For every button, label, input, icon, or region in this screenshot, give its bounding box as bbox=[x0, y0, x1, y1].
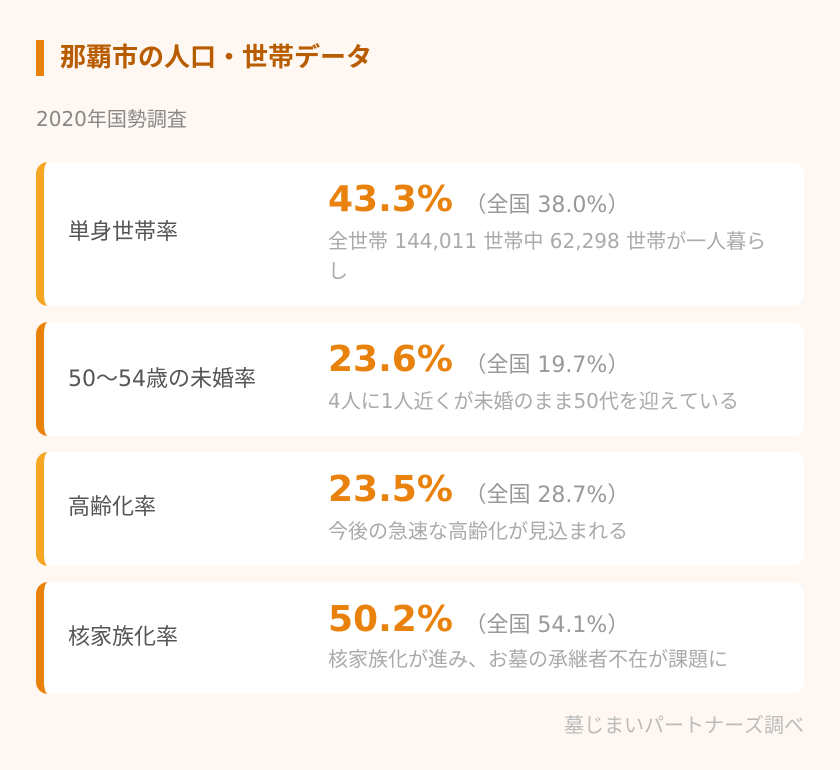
footer credit: 墓じまいパートナーズ調べ bbox=[564, 713, 804, 737]
note: unmarried description: 4人に1人近くが未婚のまま50代を迎えている bbox=[328, 389, 739, 413]
label: aging rate: 高齢化率 bbox=[68, 495, 156, 520]
value: 43.3% vs national: 43.3% （全国 38.0%） bbox=[328, 179, 629, 220]
note: aging description: 今後の急速な高齢化が見込まれる bbox=[328, 519, 628, 543]
note: household counts: 全世帯 144,011 世帯中 62,298 世帯が一人暮らし bbox=[328, 229, 766, 283]
value: 50.2% vs national: 50.2% （全国 54.1%） bbox=[328, 599, 629, 640]
label: single-person household rate: 単身世帯率 bbox=[68, 220, 178, 245]
title: 那覇市の人口・世帯データ bbox=[60, 43, 372, 73]
panel: single-person household rate bbox=[36, 162, 804, 306]
panel: aging rate bbox=[36, 452, 804, 566]
note: nuclear family description: 核家族化が進み、お墓の承継者不在が課題に bbox=[328, 647, 728, 671]
value: 23.6% vs national: 23.6% （全国 19.7%） bbox=[328, 339, 629, 380]
subtitle: source year: 2020年国勢調査 bbox=[36, 107, 187, 131]
panel: nuclear family rate bbox=[36, 582, 804, 694]
label: unmarried rate: 50～54歳の未婚率 bbox=[68, 367, 256, 392]
panel: unmarried rate age 50-54 bbox=[36, 322, 804, 436]
label: nuclear family rate: 核家族化率 bbox=[68, 625, 178, 650]
value: 23.5% vs national: 23.5% （全国 28.7%） bbox=[328, 469, 629, 510]
